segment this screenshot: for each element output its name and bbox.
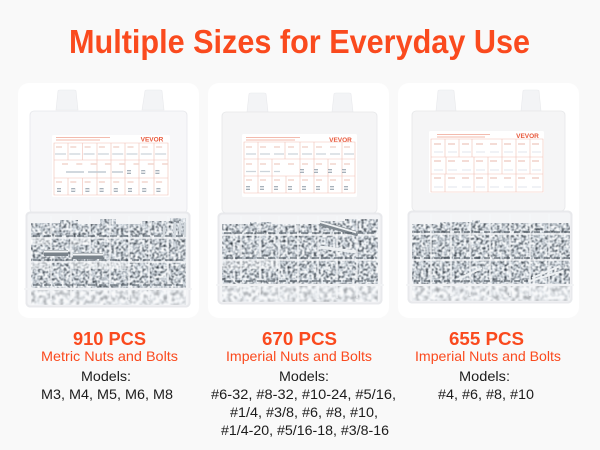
caption: 655 pcs: #4, #6, #8, #10 [438,386,534,402]
product label: VEVOR [516,133,539,140]
caption: 655 pcs: 655 PCS [449,329,524,349]
caption: 655 pcs: Imperial Nuts and Bolts [415,348,561,364]
panel: 655 pcs box [398,83,579,318]
caption: 670 pcs: #6-32, #8-32, #10-24, #5/16, [211,386,396,402]
caption: 910 pcs: Models: [81,368,131,384]
caption: 670 pcs: Models: [279,368,329,384]
panel: 910 pcs box [18,83,199,318]
caption: 670 pcs: 670 PCS [262,329,337,349]
caption: 910 pcs [41,329,178,402]
product label: VEVOR [141,136,164,144]
product label [242,134,357,197]
parts tray [216,213,384,304]
caption: 670 pcs: #1/4, #3/8, #6, #8, #10, [230,404,378,420]
product label [429,131,544,193]
panel: 670 pcs box [208,83,389,318]
caption: 670 pcs: #1/4-20, #5/16-18, #3/8-16 [221,422,389,438]
caption: 910 pcs: Metric Nuts and Bolts [41,348,178,364]
parts tray [406,211,574,303]
title: Multiple Sizes for Everyday Use [69,23,530,60]
product label: VEVOR [329,137,352,144]
parts tray [24,212,192,307]
caption: 655 pcs: Models: [459,368,510,384]
caption: 910 pcs: M3, M4, M5, M6, M8 [41,386,173,402]
caption: 910 pcs: 910 PCS [73,329,146,349]
caption: 670 pcs [211,329,396,438]
product label [52,135,170,197]
caption: 670 pcs: Imperial Nuts and Bolts [226,348,372,364]
caption: 655 pcs [415,329,561,402]
